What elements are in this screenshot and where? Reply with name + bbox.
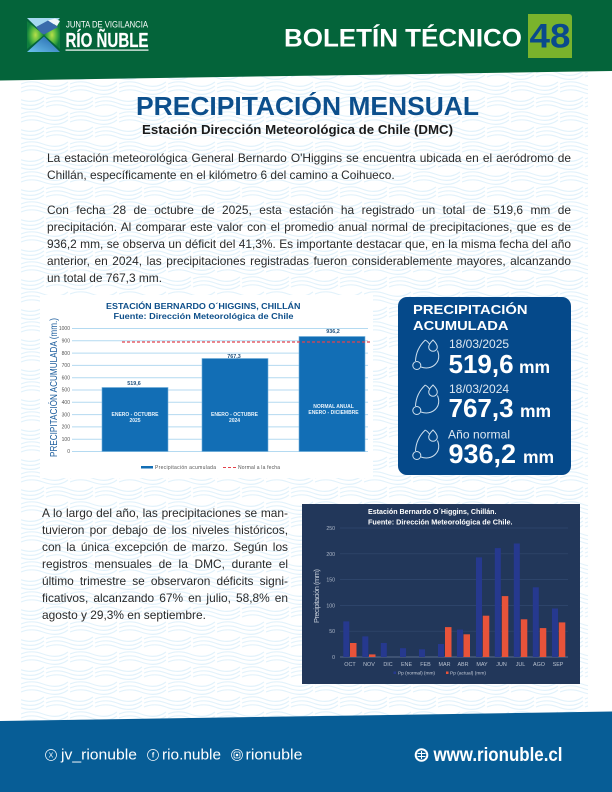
icon: X: X <box>49 752 54 760</box>
month labels: NOV <box>363 662 375 668</box>
logo: Junta de Vigilancia Río Ñuble <box>27 18 148 52</box>
stat: 2024: mm <box>520 401 551 421</box>
text: La estación meteorológica General Bernardo O'Higgins se encuentra ubicada en el aeródromo de <box>47 151 571 165</box>
stat: 2025: mm <box>519 357 550 377</box>
chart title: ESTACIÓN BERNARDO O´HIGGINS, CHILLÁN <box>106 300 300 311</box>
bar chart: monthly precipitation: 100 <box>326 603 335 609</box>
footer band <box>0 712 612 792</box>
logo: Junta de Vigilancia Río Ñuble: JUNTA DE VIGILANCIA <box>66 20 148 30</box>
month labels: FEB <box>420 662 431 668</box>
stat: normal year: Año normal <box>448 428 510 442</box>
social media handles <box>46 746 302 764</box>
normal series bars <box>343 544 558 657</box>
bar chart: accumulated precipitation: NORMAL ANUAL <box>313 404 354 410</box>
text: con la única excepción de marzo. Según los <box>42 540 288 554</box>
text block: station description <box>47 151 571 182</box>
bar chart: accumulated precipitation: 100 <box>62 437 70 443</box>
stat: 2025: 18/03/2025 <box>449 337 509 351</box>
icon: Instagram <box>232 750 242 760</box>
bar chart: accumulated precipitation: 800 <box>62 351 70 357</box>
month labels: MAR <box>439 662 451 668</box>
stat: 2025 <box>413 337 550 379</box>
text: Chillán, específicamente en el kilómetro 6 del camino a Coihueco. <box>47 168 395 182</box>
month labels: SEP <box>553 662 564 668</box>
bar chart: monthly precipitation <box>302 504 580 684</box>
text: A lo largo del año, las precipitaciones se man- <box>42 506 288 520</box>
chart title: Estación Bernardo O´Higgins, Chillán. <box>368 507 496 516</box>
text: precipitación. Al comparar este valor con el promedio anual normal de precipitaciones, que es de <box>47 220 571 234</box>
normal reference line <box>122 341 370 343</box>
panel heading: ACUMULADA <box>413 318 509 333</box>
website: www.rionuble.cl <box>433 745 562 766</box>
bars <box>102 336 365 452</box>
bar chart: accumulated precipitation: 1000 <box>59 326 70 332</box>
bar chart: accumulated precipitation: 900 <box>62 338 70 344</box>
month labels: OCT <box>344 662 356 668</box>
panel heading: PRECIPITACIÓN <box>413 302 528 317</box>
bar chart: monthly precipitation: 50 <box>329 629 335 635</box>
chart title <box>106 300 300 321</box>
actual series bars <box>350 596 565 657</box>
panel heading <box>413 302 528 333</box>
bar chart: accumulated precipitation: 0 <box>67 449 70 455</box>
stat: 2024: 18/03/2024 <box>449 382 509 396</box>
legend: Precipitación acumulada <box>155 465 216 471</box>
month labels: ENE <box>401 662 412 668</box>
legend: Normal a la fecha <box>238 465 280 471</box>
icon: globe <box>415 748 428 762</box>
bar chart: accumulated precipitation: ENERO - DICIEMBRE <box>308 410 359 416</box>
text: anterior, en 2024, las precipitaciones registradas fueron considerablemente mayores, alcanzando <box>47 254 571 268</box>
bar chart: monthly precipitation: 0 <box>332 655 335 661</box>
y axis title: PRECIPITACIÓN ACUMULADA (mm.) <box>47 318 60 457</box>
text: registros mensuales de la DMC, durante el <box>42 557 288 571</box>
bulletin number badge: 48 <box>530 18 570 56</box>
y axis title: Precipitación (mm) <box>312 568 321 623</box>
month labels: JUN <box>496 662 507 668</box>
bar labels: 519,6 <box>127 381 141 387</box>
bar chart: accumulated precipitation: 600 <box>62 375 70 381</box>
legend <box>394 670 486 676</box>
bar chart: accumulated precipitation: 2024 <box>229 418 240 424</box>
legend <box>141 465 280 471</box>
stat: normal year: 936,2 <box>448 439 516 469</box>
stat: 2024 <box>413 382 551 423</box>
social media handles: rio.nuble <box>162 746 221 764</box>
month labels <box>344 662 564 668</box>
text: tuvieron por debajo de los niveles históricos, <box>42 523 288 537</box>
stat: normal year <box>413 428 554 469</box>
icon: X <box>46 750 56 760</box>
month labels: ABR <box>457 662 469 668</box>
legend: Pp (actual) (mm) <box>450 670 486 676</box>
bar chart: accumulated precipitation <box>40 295 373 478</box>
text: ficativos, alcanzando 67% en julio, 58,8% en <box>42 591 288 605</box>
bar chart: accumulated precipitation: ENERO - OCTUBRE <box>112 412 159 418</box>
text: Con fecha 28 de octubre de 2025, esta estación ha registrado un total de 519,6 mm de <box>47 203 571 217</box>
social media handles: rionuble <box>246 746 302 764</box>
bar chart: accumulated precipitation: 500 <box>62 388 70 394</box>
bar chart: accumulated precipitation: 2025 <box>129 418 141 424</box>
legend: Pp (normal) (mm) <box>398 670 435 676</box>
header title: BOLETÍN TÉCNICO <box>284 24 522 52</box>
bar labels: 936,2 <box>326 329 340 335</box>
text: agosto y 29,3% en septiembre. <box>42 608 206 622</box>
stat: normal year: mm <box>523 447 554 467</box>
panel: accumulated precipitation figures <box>398 297 571 475</box>
text: 936,2 mm, se observa un déficit del 41,3%. Es importante destacar que, en la misma fecha del año <box>47 237 571 251</box>
chart title: Fuente: Dirección Meteorológica de Chile <box>114 311 294 321</box>
month labels: AGO <box>533 662 545 668</box>
header band <box>0 0 612 80</box>
month labels: JUL <box>516 662 525 668</box>
chart title: Fuente: Dirección Meteorológica de Chile. <box>368 518 513 526</box>
bar chart: monthly precipitation: 200 <box>326 552 335 558</box>
bar chart: accumulated precipitation: 700 <box>62 363 70 369</box>
text block: rainfall deficit analysis <box>47 203 571 285</box>
bar chart: accumulated precipitation: 200 <box>62 425 70 431</box>
stat: 2024: 767,3 <box>448 393 514 423</box>
bar labels <box>127 329 340 387</box>
month labels: MAY <box>476 662 488 668</box>
month labels: DIC <box>383 662 393 668</box>
chart title <box>368 507 513 526</box>
wave background pattern <box>21 72 588 722</box>
social media handles: jv_rionuble <box>60 746 137 764</box>
text: último trimestre se observaron déficits signi- <box>42 574 288 588</box>
bar chart: monthly precipitation: 150 <box>326 578 335 584</box>
stat: 2025: 519,6 <box>448 349 514 379</box>
main heading: PRECIPITACIÓN MENSUAL <box>136 91 479 121</box>
logo: Junta de Vigilancia Río Ñuble: RÍO ÑUBLE <box>66 29 148 52</box>
icon: Facebook <box>148 750 158 760</box>
icon: Facebook: f <box>152 752 155 760</box>
bar chart: accumulated precipitation: 300 <box>62 412 70 418</box>
text block: monthly summary <box>42 506 288 622</box>
bar chart: monthly precipitation: 250 <box>326 526 335 532</box>
bar chart: accumulated precipitation: 400 <box>62 400 70 406</box>
subheading: Estación Dirección Meteorológica de Chile (DMC) <box>142 123 453 137</box>
bar chart: accumulated precipitation: ENERO - OCTUBRE <box>211 412 259 418</box>
bar labels: 767,3 <box>227 354 241 360</box>
text: un total de 767,3 mm. <box>47 271 162 285</box>
